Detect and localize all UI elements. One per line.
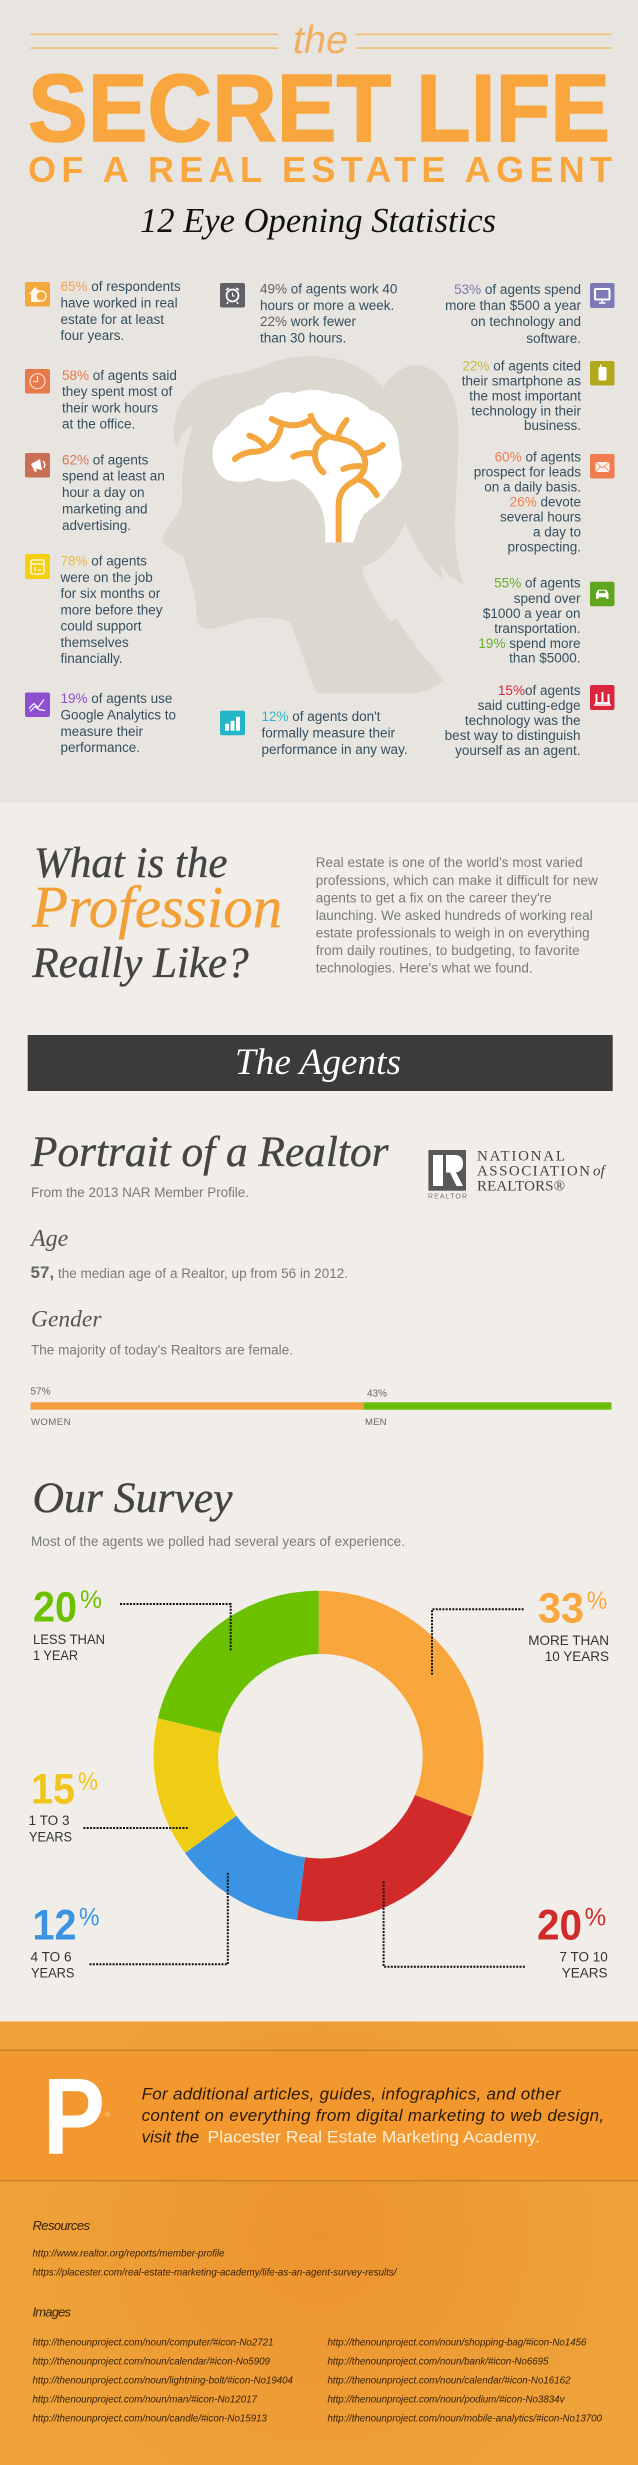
text: performance. [60,740,140,755]
text: advertising. [62,518,131,533]
text: transportation. [494,621,580,636]
heading: what is the profession really like: What is the [34,840,227,887]
text: of agents work 40 [287,282,397,297]
text: 22% [462,359,489,374]
icon: alarm clock [220,283,245,308]
callout: 33% more than 10 years [432,1585,609,1676]
image credits: http://thenounproject.com/noun/lightning-bolt/#icon-No19404 [32,2376,294,2387]
stat: 53% [445,282,614,346]
icon: phone [590,361,614,386]
text: 78% [60,554,88,569]
head [162,356,464,693]
text: at the office. [62,417,135,432]
intro paragraph: from daily routines, to budgeting, to favorite [316,943,580,958]
stat: 78% [25,554,163,666]
text: themselves [60,635,129,650]
text: they spent most of [62,384,173,399]
image credits: http://thenounproject.com/noun/podium/#icon-No3834v [328,2395,566,2406]
banner: the agents [28,1035,613,1091]
text: several hours [500,510,581,524]
text: said cutting-edge [478,698,580,713]
promo text: visit the [142,2128,199,2147]
image credits [32,2305,603,2425]
promo band: ® [105,2111,111,2119]
heading: what is the profession really like: Profession [31,874,282,940]
image credits: http://thenounproject.com/noun/shopping-bag/#icon-No1456 [328,2338,587,2349]
callout: 20% less than 1 year: % [80,1586,102,1614]
text: of agents [521,576,581,591]
callout: 33% more than 10 years: 10 YEARS [545,1649,609,1664]
stat: 15% [445,683,614,758]
age text: 57, [30,1263,54,1282]
text: of agents [88,554,147,569]
text: technology in their [471,404,581,418]
callout: 15% 1 to 3 years: YEARS [29,1830,72,1845]
logo: national association of realtors: of [593,1164,606,1180]
resources: Resources [32,2218,90,2233]
icon: line chart [25,692,50,717]
stat: 58% [25,368,177,432]
text: measure their [60,724,144,739]
text: their work hours [62,400,158,416]
image credits: http://thenounproject.com/noun/candle/#icon-No15913 [32,2414,268,2425]
brain lines [235,413,383,542]
text: could support [60,619,142,634]
text: technology was the [465,713,580,728]
logo: placester P: P [43,2056,105,2178]
text: 15% [498,683,525,698]
image credits: http://thenounproject.com/noun/bank/#icon-No6695 [328,2357,549,2368]
image credits: http://thenounproject.com/noun/mobile-analytics/#icon-No13700 [328,2414,603,2425]
text: formally measure their [262,726,396,741]
heading: portrait of a realtor: Portrait of a Realtor [30,1129,389,1176]
text: marketing and [62,501,148,516]
gender bar chart: 43% [367,1389,387,1400]
callout: 20% 7 to 10 years: 7 TO 10 [560,1949,608,1964]
text: 62% [62,453,89,468]
promo text: For additional articles, guides, infographics, and other [142,2084,562,2103]
promo band [0,2050,638,2182]
text: spend more [505,636,580,651]
text: their smartphone as [462,374,581,388]
text: 65% [60,279,88,294]
text: performance in any way. [262,742,408,757]
icon: car [590,582,614,606]
text: business. [524,418,581,433]
stat: 65% [25,279,181,343]
callout: 15% 1 to 3 years: 1 TO 3 [28,1813,70,1828]
text: 49% [260,282,287,297]
text: 19% [60,691,88,706]
callout: 20% less than 1 year: 20 [33,1583,77,1631]
logo: national association of realtors: REALTORS® [477,1179,565,1195]
callout: 15% 1 to 3 years: 15 [31,1765,75,1813]
image credits: http://thenounproject.com/noun/calendar/#icon-No5909 [32,2357,271,2368]
promo text [142,2084,604,2147]
callout: 12% 4 to 6 years: % [79,1904,100,1932]
icon: clock [25,369,50,394]
survey text: Most of the agents we polled had several years of experience. [31,1534,405,1549]
icon: monitor [590,283,614,308]
intro paragraph [316,855,598,976]
intro paragraph: technologies. Here's what we found. [316,961,533,976]
text: of agents don't [289,709,381,724]
callout: 12% 4 to 6 years: 12 [32,1901,76,1949]
gender text: The majority of today's Realtors are female. [31,1343,293,1358]
text: hour a day on [62,485,145,500]
text: $1000 a year on [483,606,580,621]
stat: 49% [220,282,397,346]
callout: 20% less than 1 year: LESS THAN [33,1632,105,1647]
callout: 33% more than 10 years: MORE THAN [528,1633,609,1648]
text: of agents [522,450,581,465]
text: of agents cited [489,359,581,374]
gender heading: Gender [31,1307,102,1333]
text: four years. [60,328,124,343]
logo: national association of realtors [428,1149,606,1201]
intro paragraph: Real estate is one of the world's most varied [316,855,583,870]
callout: 20% 7 to 10 years [384,1881,608,1980]
footer panel [0,2021,638,2465]
gender bar chart [30,1387,612,1428]
title: of a real estate agent: OF A REAL ESTATE AGENT [28,149,612,190]
callout: 15% 1 to 3 years: % [78,1768,98,1796]
intro paragraph: professions, which can make it difficult for new [316,873,598,888]
image credits: Images [32,2305,72,2320]
promo text: content on everything from digital marketing to web design, [142,2106,604,2125]
text: work fewer [287,314,357,329]
text: of agents [525,683,581,698]
stat: 22% smartphone [462,359,614,433]
intro paragraph: agents to get a fix on the career they're [316,891,552,906]
text: than $5000. [509,651,580,666]
text: spend over [514,591,581,606]
donut chart [154,1591,484,1921]
text: of agents spend [481,282,581,297]
head silhouette with brain [162,356,464,693]
logo: national association of realtors: REALTOR [428,1194,467,1201]
text: estate for at least [60,312,164,327]
heading: what is the profession really like [31,840,282,987]
text: 53% [454,282,481,297]
heading: our survey: Our Survey [32,1475,233,1522]
title [28,19,612,190]
image credits: http://thenounproject.com/noun/man/#icon-No12017 [32,2395,258,2406]
gender bar chart: MEN [365,1417,387,1428]
text: prospecting. [507,540,581,555]
text: the most important [469,388,581,404]
icon: candles [590,685,614,710]
heading: what is the profession really like: Really Like? [32,940,249,987]
text: prospect for leads [474,465,581,480]
text: hours or more a week. [260,298,394,313]
promo text: Placester Real Estate Marketing Academy. [208,2128,540,2147]
text: were on the job [60,570,153,585]
age heading: Age [29,1226,69,1252]
age text: the median age of a Realtor, up from 56 in 2012. [58,1266,348,1281]
title word: the: the [293,19,348,62]
source note: From the 2013 NAR Member Profile. [31,1185,249,1200]
icon: envelope [590,454,614,478]
text: of agents use [88,691,172,706]
icon: calendar [25,554,50,579]
resources: https://placester.com/real-estate-marketing-academy/life-as-an-agent-survey-results/ [32,2268,398,2279]
text: spend at least an [62,469,165,484]
icon: house with coin [25,282,50,306]
callout: 33% more than 10 years: % [587,1587,607,1615]
gender bar chart: 57% [30,1387,51,1398]
image credits: http://thenounproject.com/noun/computer/#icon-No2721 [32,2338,274,2349]
callout: 33% more than 10 years: 33 [538,1585,584,1633]
text: 26% [510,495,537,510]
stat: 55% [478,576,614,666]
callout: 20% less than 1 year: 1 YEAR [33,1648,78,1663]
text: of respondents [88,279,181,294]
text: devote [537,495,581,510]
text: on a daily basis. [484,480,581,495]
icon: bars [220,711,245,735]
callout: 20% less than 1 year [33,1583,231,1663]
text: more than $500 a year [445,298,581,313]
text: software. [526,331,581,346]
icon: megaphone [25,453,50,478]
text: 22% [260,314,287,329]
gender bar chart: WOMEN [31,1417,71,1428]
intro paragraph: launching. We asked hundreds of working real [316,908,593,923]
resources: http://www.realtor.org/reports/member-profile [32,2249,225,2260]
resources [32,2218,398,2279]
callout: 12% 4 to 6 years: 4 TO 6 [30,1949,72,1964]
image credits: http://thenounproject.com/noun/calendar/#icon-No16162 [328,2376,571,2387]
text: 19% [478,636,505,651]
text: than 30 hours. [260,331,346,346]
text: 12% [262,709,289,724]
text: best way to distinguish [445,728,580,743]
text: financially. [60,651,123,666]
title: secret life: SECRET LIFE [28,55,610,162]
callout: 15% 1 to 3 years [28,1765,188,1845]
text: of agents said [89,368,177,383]
brain [213,390,402,542]
text: a day to [533,525,581,540]
text: yourself as an agent. [455,743,580,758]
text: more before they [60,603,163,618]
stat: 19% analytics [25,691,176,755]
text: of agents [89,453,149,468]
text: on technology and [471,314,581,329]
callout: 20% 7 to 10 years: % [585,1904,606,1932]
logo: national association of realtors: NATIONAL [477,1149,565,1165]
stat: 62% [25,453,165,533]
text: Google Analytics to [60,708,176,723]
stat: 60% [474,450,614,555]
text: for six months or [60,586,161,601]
banner: the agents: The Agents [235,1042,401,1083]
text: 60% [495,450,522,465]
subtitle: 12 Eye Opening Statistics [140,202,496,240]
callout: 12% 4 to 6 years: YEARS [31,1965,74,1980]
intro paragraph: estate professionals to weigh in on everything [316,926,590,941]
text: 58% [62,368,89,383]
logo: national association of realtors: ASSOCIATION [477,1164,590,1180]
callout: 20% 7 to 10 years: YEARS [562,1965,608,1980]
callout: 20% 7 to 10 years: 20 [537,1901,582,1949]
text: 55% [494,576,521,591]
stat: 12% [220,709,408,757]
callout: 12% 4 to 6 years [30,1873,228,1980]
text: have worked in real [60,296,178,310]
